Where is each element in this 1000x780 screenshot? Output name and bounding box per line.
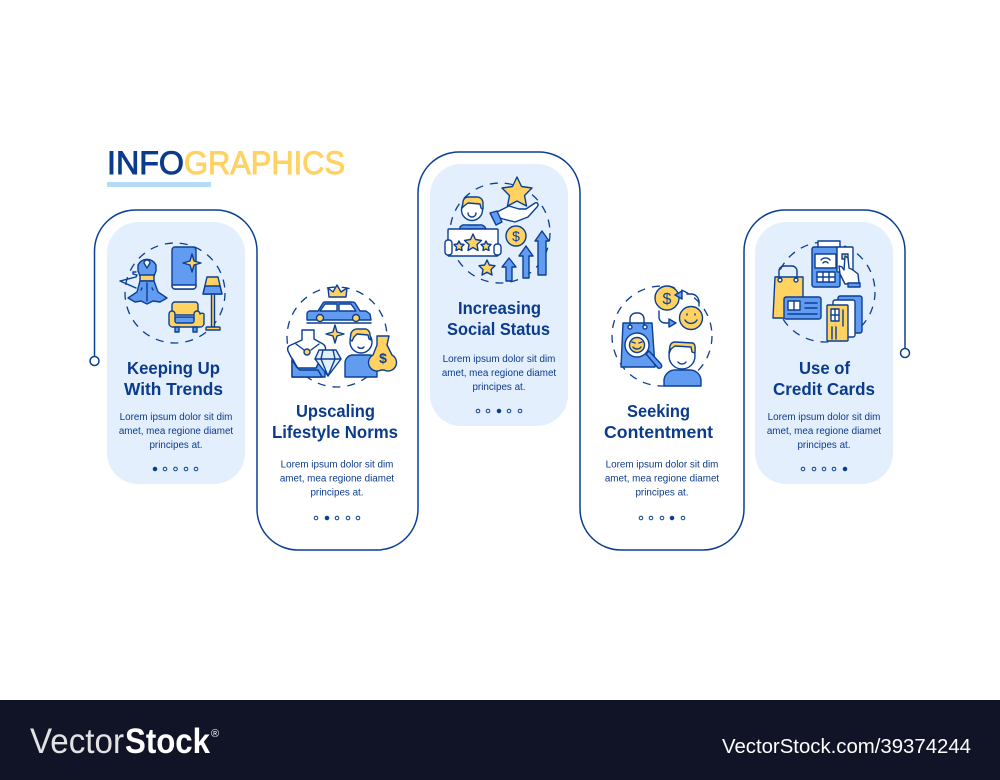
text block: Lorem ipsum dolor sit dim bbox=[120, 412, 232, 423]
watermark logo: ® bbox=[211, 728, 219, 740]
pagination dots bbox=[476, 409, 522, 413]
text block: amet, mea regione diamet bbox=[280, 474, 394, 484]
pagination dots bbox=[801, 467, 847, 471]
text block: amet, mea regione diamet bbox=[442, 368, 556, 379]
pagination dots bbox=[639, 516, 685, 520]
pagination dots bbox=[153, 467, 198, 471]
icon: credit cards bbox=[773, 241, 875, 342]
icon: luxury lifestyle bbox=[287, 285, 396, 387]
text block: amet, mea regione diamet bbox=[119, 426, 233, 437]
text block: Lorem ipsum dolor sit dim bbox=[768, 412, 880, 423]
text block: principes at. bbox=[635, 488, 689, 498]
watermark logo bbox=[30, 722, 219, 761]
text block bbox=[280, 460, 394, 498]
icon: social status: $ bbox=[512, 228, 520, 244]
title bbox=[107, 145, 345, 187]
text block: principes at. bbox=[797, 440, 851, 451]
heading bbox=[773, 358, 875, 399]
heading: Upscaling bbox=[296, 401, 375, 421]
text block: Lorem ipsum dolor sit dim bbox=[606, 460, 718, 470]
text block: Lorem ipsum dolor sit dim bbox=[281, 460, 393, 470]
text block bbox=[442, 354, 556, 393]
watermark logo: Stock bbox=[125, 722, 210, 761]
text block bbox=[119, 412, 233, 451]
text block: amet, mea regione diamet bbox=[605, 474, 719, 484]
heading: Keeping Up bbox=[127, 358, 220, 378]
watermark url: VectorStock.com/39374244 bbox=[722, 736, 971, 758]
text block: principes at. bbox=[310, 488, 364, 498]
panel: seeking contentment bbox=[604, 286, 719, 520]
icon: contentment: $ bbox=[663, 291, 672, 308]
heading: Use of bbox=[799, 358, 850, 378]
heading: Contentment bbox=[604, 422, 713, 442]
text block: principes at. bbox=[149, 440, 203, 451]
icon: fashion and trends bbox=[120, 243, 225, 343]
pagination dots bbox=[314, 516, 360, 520]
panel: use of credit cards bbox=[755, 222, 893, 484]
heading: Increasing bbox=[458, 298, 541, 318]
text block bbox=[605, 460, 719, 498]
footer bar bbox=[0, 700, 1000, 780]
icon: luxury lifestyle: $ bbox=[379, 350, 387, 366]
panel: increasing social status bbox=[430, 164, 568, 426]
panel: upscaling lifestyle norms bbox=[272, 285, 398, 520]
heading bbox=[272, 401, 398, 442]
text block: principes at. bbox=[472, 382, 526, 393]
title: GRAPHICS bbox=[184, 145, 345, 181]
title: INFO bbox=[107, 145, 184, 181]
connecting outline bbox=[90, 152, 910, 550]
icon: social status bbox=[445, 177, 550, 283]
icon: contentment bbox=[612, 286, 712, 386]
heading: Seeking bbox=[627, 401, 690, 421]
heading bbox=[124, 358, 223, 399]
text block bbox=[767, 412, 881, 451]
text block: amet, mea regione diamet bbox=[767, 426, 881, 437]
heading bbox=[447, 298, 550, 339]
heading: Credit Cards bbox=[773, 379, 875, 399]
heading bbox=[604, 401, 713, 442]
panel: keeping up with trends bbox=[107, 222, 245, 484]
watermark logo: Vector bbox=[30, 722, 124, 761]
heading: Social Status bbox=[447, 319, 550, 339]
heading: With Trends bbox=[124, 379, 223, 399]
heading: Lifestyle Norms bbox=[272, 422, 398, 442]
text block: Lorem ipsum dolor sit dim bbox=[443, 354, 555, 365]
